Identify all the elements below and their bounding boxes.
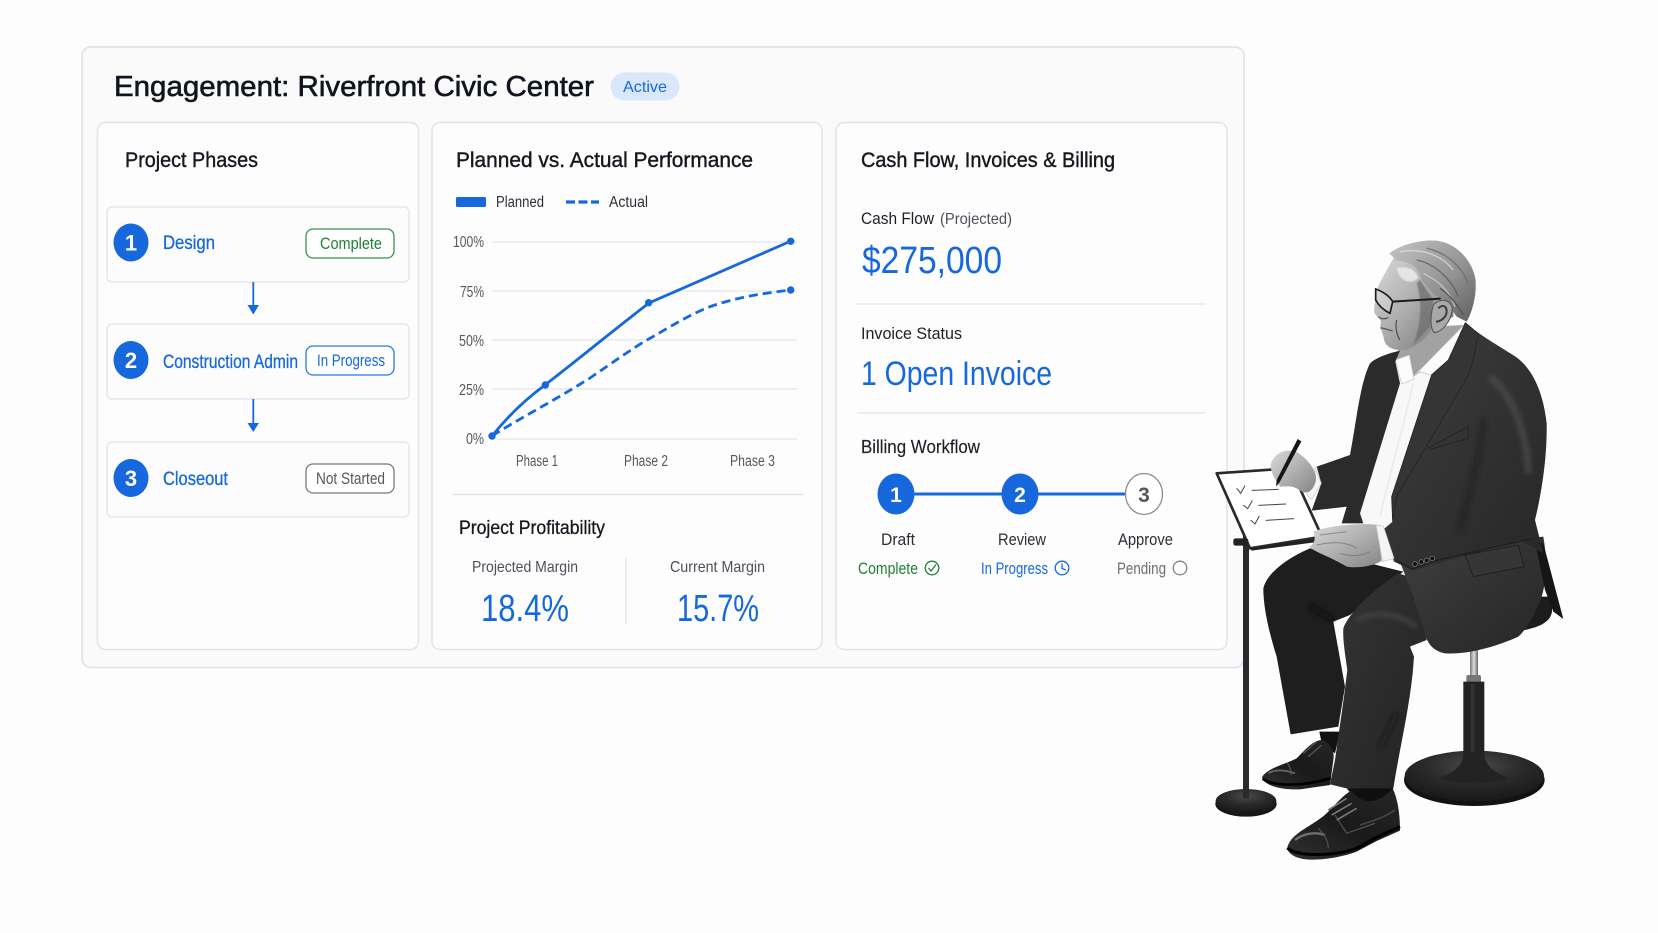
x axis labels: Phase 2 — [624, 453, 668, 470]
hair — [1389, 240, 1476, 322]
y axis labels: 100% — [453, 234, 484, 251]
sleeve edge — [1397, 538, 1533, 569]
step 3 approve: 3 — [1138, 484, 1150, 507]
phase 1: design: Complete — [320, 235, 382, 253]
planned series — [492, 241, 791, 436]
sleeve buttons — [1413, 556, 1435, 566]
step 1 draft — [858, 474, 939, 578]
y axis labels: 50% — [459, 333, 484, 350]
cash flow card — [836, 122, 1227, 650]
y axis labels — [453, 234, 484, 448]
neck — [1397, 325, 1463, 377]
divider — [452, 494, 804, 496]
step 1 draft: 1 — [890, 484, 902, 507]
hair strands — [1400, 248, 1468, 315]
step 1 draft: Draft — [881, 530, 915, 549]
metric: projected margin: 18.4% — [481, 588, 569, 630]
cash flow block: $275,000 — [862, 240, 1002, 282]
near trouser leg — [1330, 573, 1427, 788]
phase 1: design — [107, 207, 409, 282]
writing hand — [1271, 451, 1316, 492]
phase 1: design: Design — [163, 233, 215, 254]
jacket left front — [1312, 351, 1400, 523]
face — [1374, 253, 1457, 350]
chart legend — [456, 194, 648, 211]
metric: current margin: Current Margin — [670, 559, 765, 576]
jacket back flap — [1535, 542, 1563, 619]
jacket shading — [1460, 377, 1528, 530]
metric: projected margin: Projected Margin — [472, 559, 578, 576]
heading: project profitability: Project Profitability — [459, 518, 605, 539]
legs and shoes — [1262, 537, 1563, 860]
arrow: design to construction admin — [248, 282, 259, 314]
cash flow block: (Projected) — [940, 211, 1012, 228]
glasses — [1376, 289, 1441, 313]
lower hand — [1309, 524, 1382, 567]
shirt cuff — [1307, 467, 1321, 499]
phase 3: closeout: Closeout — [163, 469, 229, 490]
x axis labels — [516, 453, 775, 470]
panel: project phases — [98, 122, 418, 650]
pocket flap — [1465, 545, 1524, 577]
phases card — [98, 122, 418, 650]
phase 1: design: 1 — [125, 230, 137, 256]
lapel — [1392, 323, 1479, 522]
checklist tablet — [1217, 468, 1322, 551]
status pill: active — [610, 72, 680, 100]
arrow: construction admin to closeout — [248, 399, 259, 432]
chest pocket — [1427, 427, 1468, 450]
chart legend: Planned — [496, 194, 544, 211]
step 3 approve: Approve — [1118, 530, 1173, 549]
phase 2: construction admin — [107, 324, 409, 399]
phase 3: closeout — [107, 442, 409, 517]
collar — [1395, 324, 1465, 384]
stand bracket — [1233, 538, 1248, 546]
far shoe — [1262, 740, 1334, 789]
heading: planned vs actual: Planned vs. Actual Performance — [456, 149, 753, 172]
step 2 review — [981, 474, 1069, 578]
pen — [1276, 439, 1301, 487]
near sock — [1347, 786, 1393, 807]
status pill: active: Active — [623, 79, 667, 96]
figure: seated man with checklist — [1215, 240, 1563, 860]
head — [1374, 240, 1476, 350]
step 2 review: In Progress — [981, 560, 1048, 578]
step 2 review: Review — [998, 530, 1047, 549]
invoice status block — [861, 324, 1052, 393]
invoice status block: 1 Open Invoice — [861, 355, 1052, 393]
title: Engagement: Riverfront Civic Center — [114, 71, 594, 103]
step 3 approve: Pending — [1117, 560, 1166, 578]
x axis labels: Phase 3 — [730, 453, 775, 470]
near shoe — [1287, 788, 1400, 860]
stool — [1404, 597, 1552, 806]
performance card — [432, 122, 822, 650]
music-stand pole and base — [1215, 530, 1277, 817]
phase 2: construction admin: 2 — [125, 348, 137, 373]
chart legend: Actual — [609, 194, 648, 211]
heading: cash flow, invoices and billing: Cash Flow, Invoices & Billing — [861, 149, 1115, 172]
facial shading — [1397, 267, 1433, 345]
metric: current margin: 15.7% — [677, 588, 759, 630]
jacket main body — [1383, 323, 1547, 571]
phase 3: closeout: Not Started — [316, 470, 385, 488]
invoice status block: Invoice Status — [861, 324, 962, 343]
cash flow block: Cash Flow — [861, 209, 935, 228]
phase 2: construction admin: Construction Admin — [163, 352, 298, 373]
hand knuckle lines — [1317, 532, 1370, 556]
step 2 review: 2 — [1014, 484, 1026, 507]
metric: current margin — [670, 559, 765, 630]
jacket details — [1397, 538, 1533, 577]
line chart — [453, 234, 797, 470]
far trouser leg — [1263, 548, 1403, 734]
shirt placket — [1380, 383, 1413, 517]
step 1 draft: Complete — [858, 560, 918, 578]
metric: projected margin — [472, 559, 578, 630]
upper body — [1217, 240, 1547, 571]
far sock — [1319, 732, 1340, 753]
data points — [488, 238, 794, 440]
panel: planned vs actual performance — [432, 122, 822, 650]
billing workflow stepper: Billing Workflow — [861, 437, 981, 457]
lower cuff — [1376, 525, 1394, 562]
panel: engagement dashboard — [82, 47, 1244, 668]
phase 3: closeout: 3 — [125, 466, 137, 491]
x axis labels: Phase 1 — [516, 453, 558, 470]
step 3 approve — [1117, 474, 1187, 578]
mouth and nose lines — [1378, 317, 1400, 340]
ear — [1431, 300, 1452, 333]
heading: project phases: Project Phases — [125, 149, 258, 172]
y axis labels: 75% — [460, 284, 484, 301]
shirt — [1357, 325, 1470, 527]
phase 2: construction admin: In Progress — [317, 352, 385, 370]
jacket skirt — [1397, 537, 1546, 654]
cash flow block — [861, 209, 1012, 282]
panel: cash flow, invoices and billing — [836, 122, 1227, 650]
y axis labels: 25% — [459, 382, 484, 399]
billing workflow stepper — [858, 437, 1187, 578]
actual series — [492, 290, 791, 436]
trouser folds — [1310, 607, 1417, 747]
y axis labels: 0% — [466, 431, 484, 448]
dashboard container — [82, 47, 1244, 668]
